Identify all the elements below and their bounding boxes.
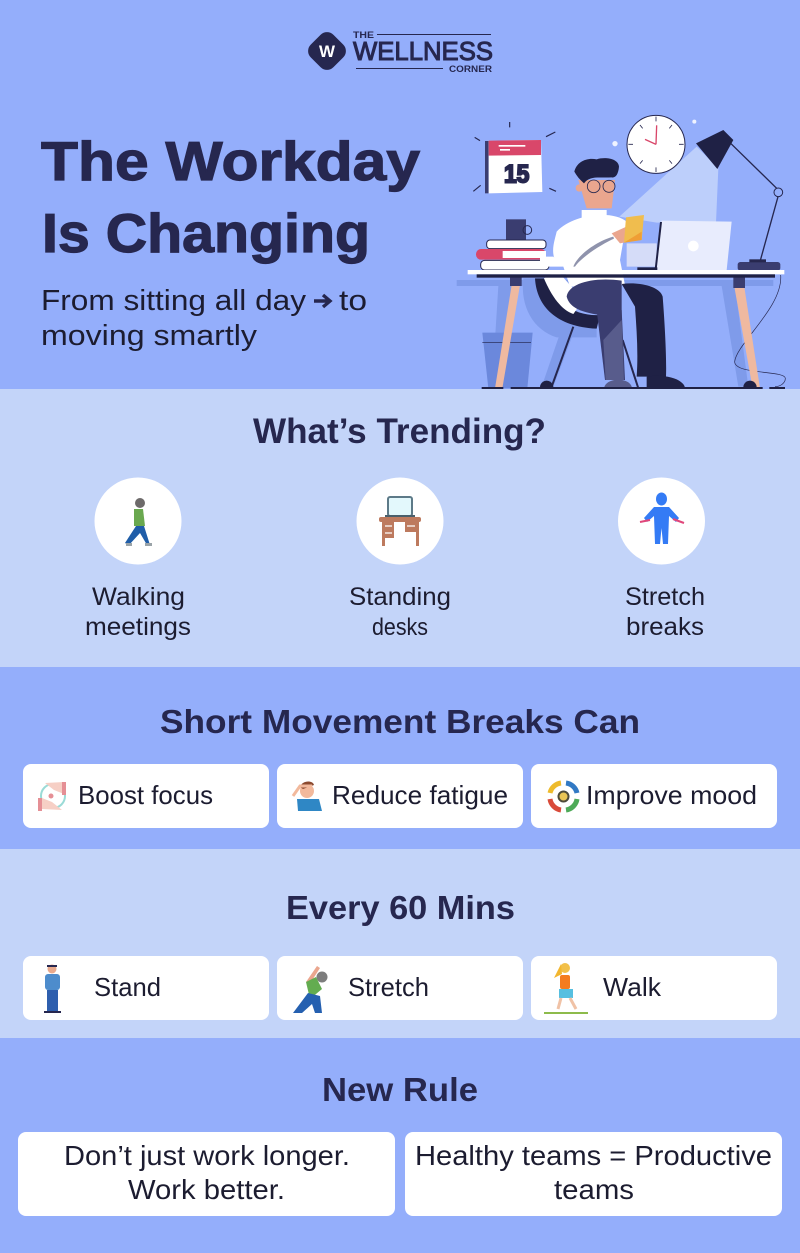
subtitle: to	[339, 285, 367, 317]
card: improve mood: Improve mood	[586, 780, 757, 810]
icon: standing man	[44, 964, 61, 1013]
panel: what's trending	[0, 389, 800, 667]
item: stretch breaks: breaks	[626, 613, 704, 641]
illustration: person working at desk	[457, 115, 785, 394]
laptop	[637, 221, 732, 270]
card: reduce fatigue: Reduce fatigue	[332, 780, 508, 810]
icon: desk with laptop	[379, 497, 421, 546]
icon: arrow	[314, 295, 330, 307]
card: reduce fatigue	[277, 764, 523, 828]
card: walk	[531, 956, 777, 1020]
wastebasket	[482, 333, 533, 388]
lamp	[696, 130, 785, 387]
card: stretch: Stretch	[348, 972, 429, 1002]
item: walking meetings	[85, 478, 191, 641]
light beam	[619, 147, 718, 223]
card: boost focus	[23, 764, 269, 828]
panel: hero	[0, 0, 800, 394]
card: work better: Don’t just work longer.	[64, 1140, 350, 1171]
heading: Short Movement Breaks Can	[160, 703, 640, 740]
card: stand: Stand	[94, 972, 161, 1002]
heading: Every 60 Mins	[286, 889, 515, 926]
logo: WELLNESS	[353, 36, 493, 66]
subtitle	[41, 285, 367, 352]
card: stand	[23, 956, 269, 1020]
calendar	[473, 122, 556, 193]
logo: W	[319, 42, 336, 61]
card: healthy teams	[405, 1132, 782, 1216]
person	[540, 158, 685, 389]
title: The Workday	[41, 130, 420, 192]
logo	[304, 28, 493, 74]
card: healthy teams: Healthy teams = Productive	[415, 1140, 772, 1171]
card: boost focus: Boost focus	[78, 780, 213, 810]
item: standing desks: Standing	[349, 583, 451, 611]
heading: What’s Trending?	[253, 412, 546, 451]
item: stretch breaks: Stretch	[625, 583, 705, 611]
card: work better	[18, 1132, 395, 1216]
phone	[624, 215, 644, 243]
card: healthy teams: teams	[554, 1174, 634, 1205]
icon: side stretch	[293, 966, 328, 1013]
icon: mood gauge	[550, 783, 577, 810]
floor lines	[482, 385, 785, 391]
title: Is Changing	[42, 202, 370, 264]
item: standing desks	[349, 478, 451, 641]
books and mug	[476, 219, 549, 270]
logo: CORNER	[449, 64, 493, 74]
item: walking meetings: meetings	[85, 613, 191, 641]
subtitle: From sitting all day	[41, 285, 307, 317]
item: standing desks: desks	[372, 614, 428, 641]
item: stretch breaks	[618, 478, 705, 641]
icon: tired person	[293, 781, 322, 811]
logo: THE	[353, 30, 374, 40]
panel: new rule	[0, 1038, 800, 1253]
clock	[627, 115, 685, 173]
subtitle: moving smartly	[41, 320, 258, 352]
item: walking meetings: Walking	[92, 583, 185, 611]
card: walk: Walk	[603, 972, 662, 1002]
table legs	[495, 277, 760, 388]
desk top	[468, 270, 784, 274]
panel: every 60 mins	[0, 849, 800, 1038]
card: work better: Work better.	[128, 1174, 285, 1205]
chair	[535, 278, 600, 329]
icon: body stretch	[640, 492, 684, 544]
icon: walking person	[125, 498, 152, 546]
title	[41, 130, 420, 264]
desk shadow	[457, 278, 773, 387]
calendar: 15	[504, 161, 529, 189]
panel: short movement breaks	[0, 667, 800, 849]
icon: jogging woman	[544, 963, 588, 1014]
icon: focus hands	[38, 782, 66, 811]
heading: New Rule	[322, 1071, 478, 1108]
card: improve mood	[531, 764, 777, 828]
card: stretch	[277, 956, 523, 1020]
